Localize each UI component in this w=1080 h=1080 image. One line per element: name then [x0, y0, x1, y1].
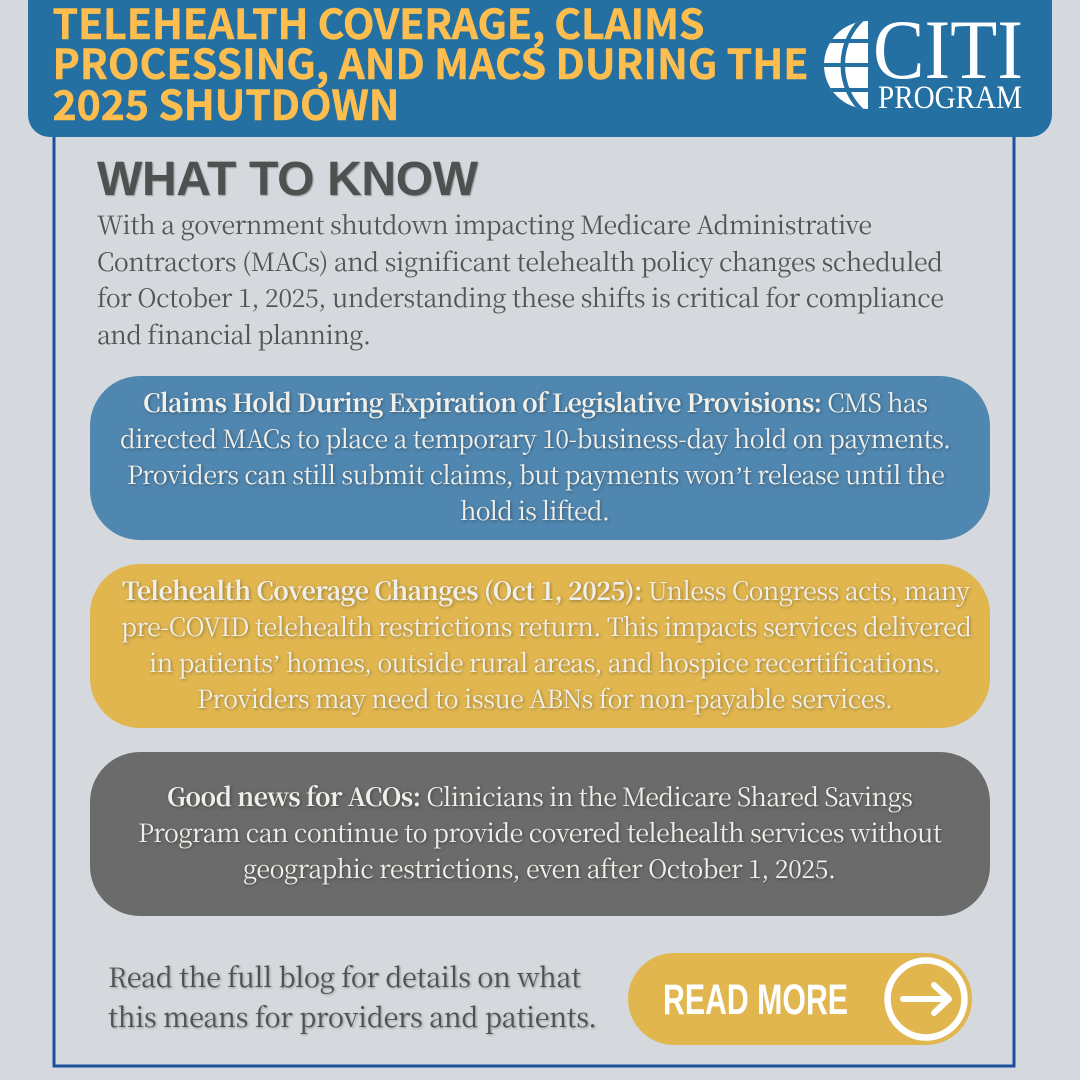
title: 2025 SHUTDOWN — [52, 72, 400, 132]
claims hold text: Claims Hold During Expiration of Legislative Provisions: CMS has — [143, 384, 928, 420]
telehealth text: Telehealth Coverage Changes (Oct 1, 2025): Unless Congress acts, many — [122, 572, 970, 608]
telehealth text: pre-COVID telehealth restrictions return. This impacts services delivered — [121, 608, 972, 644]
claims hold text: hold is lifted. — [460, 492, 610, 528]
intro text: Contractors (MACs) and significant telehealth policy changes scheduled — [97, 243, 943, 279]
read more button — [628, 953, 972, 1045]
ACO text: Good news for ACOs: Clinicians in the Medicare Shared Savings — [167, 778, 913, 814]
telehealth text — [121, 572, 972, 716]
content frame — [54, 125, 1014, 1066]
panel: telehealth coverage changes — [90, 564, 990, 728]
ACO text: Program can continue to provide covered telehealth services without — [138, 814, 942, 850]
button label: READ MORE — [663, 976, 848, 1024]
claims hold text: directed MACs to place a temporary 10-business-day hold on payments. — [120, 420, 951, 456]
panel: good news for ACOs — [90, 752, 990, 916]
heading: what to know: WHAT TO KNOW — [97, 153, 479, 206]
intro text — [97, 206, 944, 352]
intro text: and financial planning. — [97, 316, 371, 352]
panel: claims hold — [90, 376, 990, 540]
call to action text — [108, 956, 597, 1035]
logo: CITI Program — [824, 21, 1022, 109]
title — [52, 0, 808, 132]
ACO text: geographic restrictions, even after October 1, 2025. — [243, 850, 836, 886]
telehealth text: Providers may need to issue ABNs for non-payable services. — [197, 680, 893, 716]
call to action text: Read the full blog for details on what — [108, 956, 581, 995]
call to action text: this means for providers and patients. — [108, 996, 597, 1035]
intro text: for October 1, 2025, understanding these shifts is critical for compliance — [97, 279, 944, 315]
intro text: With a government shutdown impacting Medicare Administrative — [97, 206, 872, 242]
claims hold text — [120, 384, 951, 528]
logo wordmark: CITI — [873, 3, 1023, 97]
telehealth text: in patients’ homes, outside rural areas, and hospice recertifications. — [149, 644, 941, 680]
icon: arrow in circle — [888, 960, 964, 1038]
claims hold text: Providers can still submit claims, but payments won’t release until the — [127, 456, 945, 492]
icon: globe — [824, 21, 868, 109]
header banner — [28, 0, 1052, 137]
title: PROCESSING, AND MACS DURING THE — [52, 31, 808, 91]
ACO text — [138, 778, 942, 886]
logo wordmark: PROGRAM — [878, 80, 1022, 116]
